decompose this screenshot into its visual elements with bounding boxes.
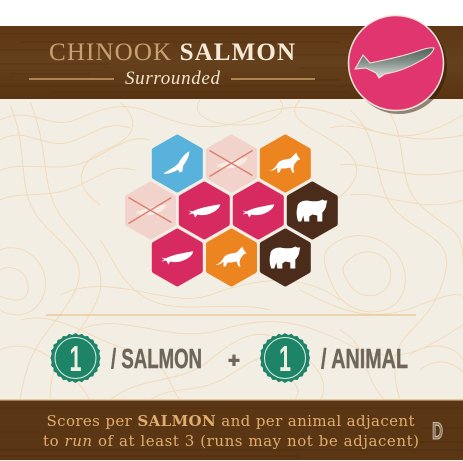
rule text: to run of at least 3 (runs may not be adjacent) <box>43 432 419 450</box>
subtitle rules <box>29 78 315 80</box>
header band <box>0 26 463 99</box>
hex: eagle on blue <box>154 137 200 190</box>
footer band <box>0 399 463 460</box>
hex: crossed-out salmon <box>208 137 254 190</box>
score badge: salmon <box>50 333 100 383</box>
hex: salmon <box>235 184 281 237</box>
hex: salmon <box>181 184 227 237</box>
score label: animal: / ANIMAL <box>321 343 408 374</box>
hex: bear <box>262 231 308 284</box>
divider <box>46 314 416 316</box>
hex: crossed-out salmon left <box>128 184 174 237</box>
score badge: animal <box>260 333 310 383</box>
rule text <box>43 412 419 450</box>
title: CHINOOK SALMON <box>49 39 295 66</box>
hex: fox on orange <box>262 137 308 190</box>
card series letter: D <box>432 418 443 445</box>
rule text: Scores per SALMON and per animal adjacent <box>46 412 414 430</box>
hex: bear <box>289 184 335 237</box>
subtitle: Surrounded <box>125 68 220 89</box>
hex: fox <box>208 231 254 284</box>
plus sign: + <box>228 350 240 372</box>
hex: salmon <box>154 231 200 284</box>
icon: salmon illustration <box>355 48 434 78</box>
icon: salmon medallion <box>348 16 447 114</box>
hex grid <box>128 137 335 284</box>
score label: salmon: / SALMON <box>111 343 202 374</box>
